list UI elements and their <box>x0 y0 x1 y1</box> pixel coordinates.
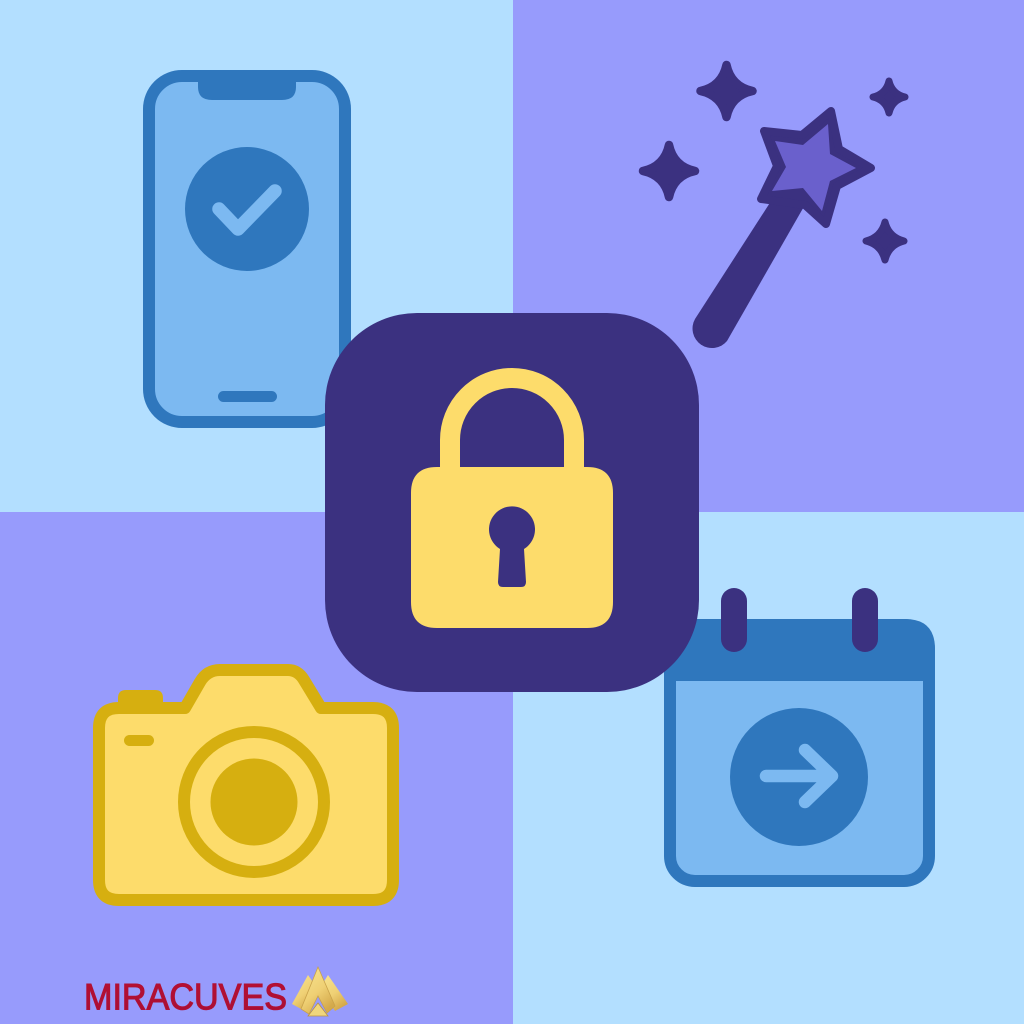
panel: bottom right quadrant <box>513 512 1024 1024</box>
phone notch <box>198 80 296 100</box>
logo: Miracuves <box>84 967 348 1018</box>
panel: top left quadrant <box>0 0 513 512</box>
home bar <box>218 391 277 402</box>
sparkle 4 <box>866 222 904 260</box>
camera body <box>99 670 393 900</box>
calendar header <box>664 619 935 681</box>
panel: top right quadrant <box>513 0 1024 512</box>
shutter button <box>118 690 163 706</box>
icon: camera <box>99 670 393 900</box>
wand star outline <box>761 111 871 224</box>
wand star fill <box>772 124 856 211</box>
arrow circle <box>730 708 868 846</box>
logo wordmark: MIRACUVES <box>84 976 287 1018</box>
icon: magic wand with sparkles <box>643 65 905 348</box>
arrow <box>766 750 832 802</box>
sparkle 3 <box>643 145 695 197</box>
logo mountain mark <box>292 967 348 1016</box>
icon: smartphone with check mark <box>149 76 345 422</box>
lock body and keyhole <box>411 467 613 628</box>
panel: central app tile <box>325 313 699 692</box>
check circle <box>185 147 309 271</box>
flash indicator <box>124 735 154 746</box>
panel: bottom left quadrant <box>0 512 513 1024</box>
lens core <box>210 758 298 846</box>
phone body <box>149 76 345 422</box>
wand handle <box>693 198 806 348</box>
shackle <box>450 378 574 475</box>
lens ring <box>184 732 324 872</box>
check mark <box>219 191 275 229</box>
right binding ring <box>852 588 878 652</box>
left binding ring <box>721 588 747 652</box>
sparkle 2 <box>873 81 905 113</box>
icon: calendar with arrow <box>664 588 935 881</box>
sparkle 1 <box>700 65 752 117</box>
calendar body <box>670 625 929 881</box>
icon: padlock <box>411 378 613 628</box>
